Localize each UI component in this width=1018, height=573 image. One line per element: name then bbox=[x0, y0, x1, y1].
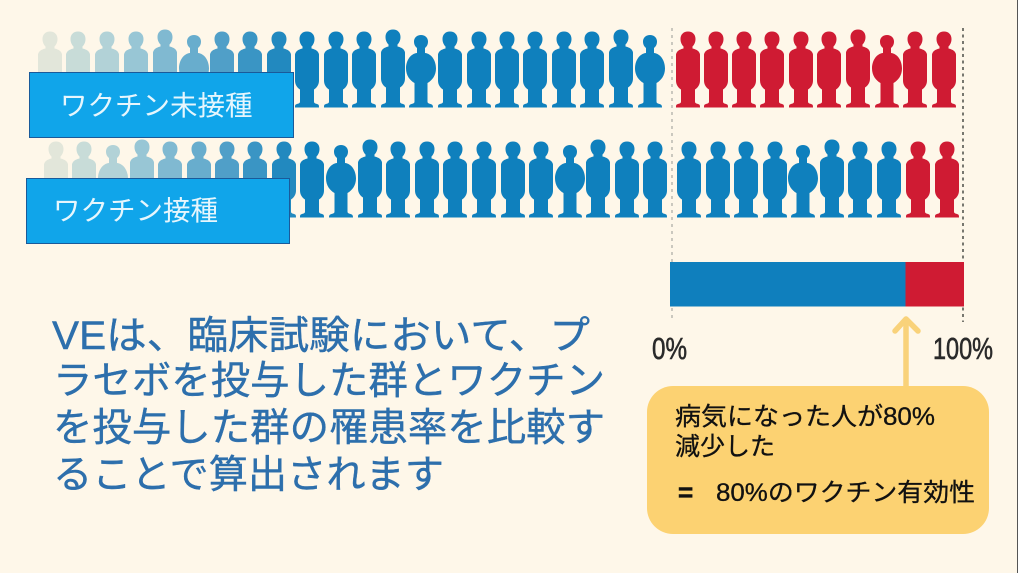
axis label: 100%: 100% bbox=[933, 331, 993, 366]
main explanation text: を投与した群の罹患率を比較す bbox=[53, 406, 605, 450]
callout text: effect: 病気になった人が80% bbox=[675, 403, 935, 431]
callout bbox=[647, 386, 989, 534]
main explanation text: ることで算出されます bbox=[53, 453, 444, 497]
label: vaccinated: ワクチン接種 bbox=[53, 195, 218, 226]
stacked bar: 80% blue, 20% red bbox=[670, 262, 964, 306]
callout text: efficacy: 80%のワクチン有効性 bbox=[716, 479, 975, 507]
main explanation text: ラセボを投与した群とワクチン bbox=[53, 359, 605, 403]
label: unvaccinated bbox=[30, 72, 294, 138]
axis label: 0%: 0% bbox=[652, 331, 687, 366]
row of people: vaccinated bbox=[44, 140, 959, 218]
row of people: unvaccinated bbox=[38, 30, 956, 108]
label: vaccinated bbox=[26, 178, 290, 244]
callout text: reduced: 減少した bbox=[675, 433, 775, 461]
main explanation text bbox=[52, 314, 605, 497]
callout text: equals: = bbox=[678, 477, 693, 507]
label: unvaccinated: ワクチン未接種 bbox=[60, 90, 252, 121]
guide line: 100% bbox=[962, 28, 964, 322]
arrow: bar to callout bbox=[895, 319, 918, 388]
guide line: 0% bbox=[671, 28, 673, 322]
main explanation text: VEは、臨床試験において、プ bbox=[52, 314, 590, 358]
